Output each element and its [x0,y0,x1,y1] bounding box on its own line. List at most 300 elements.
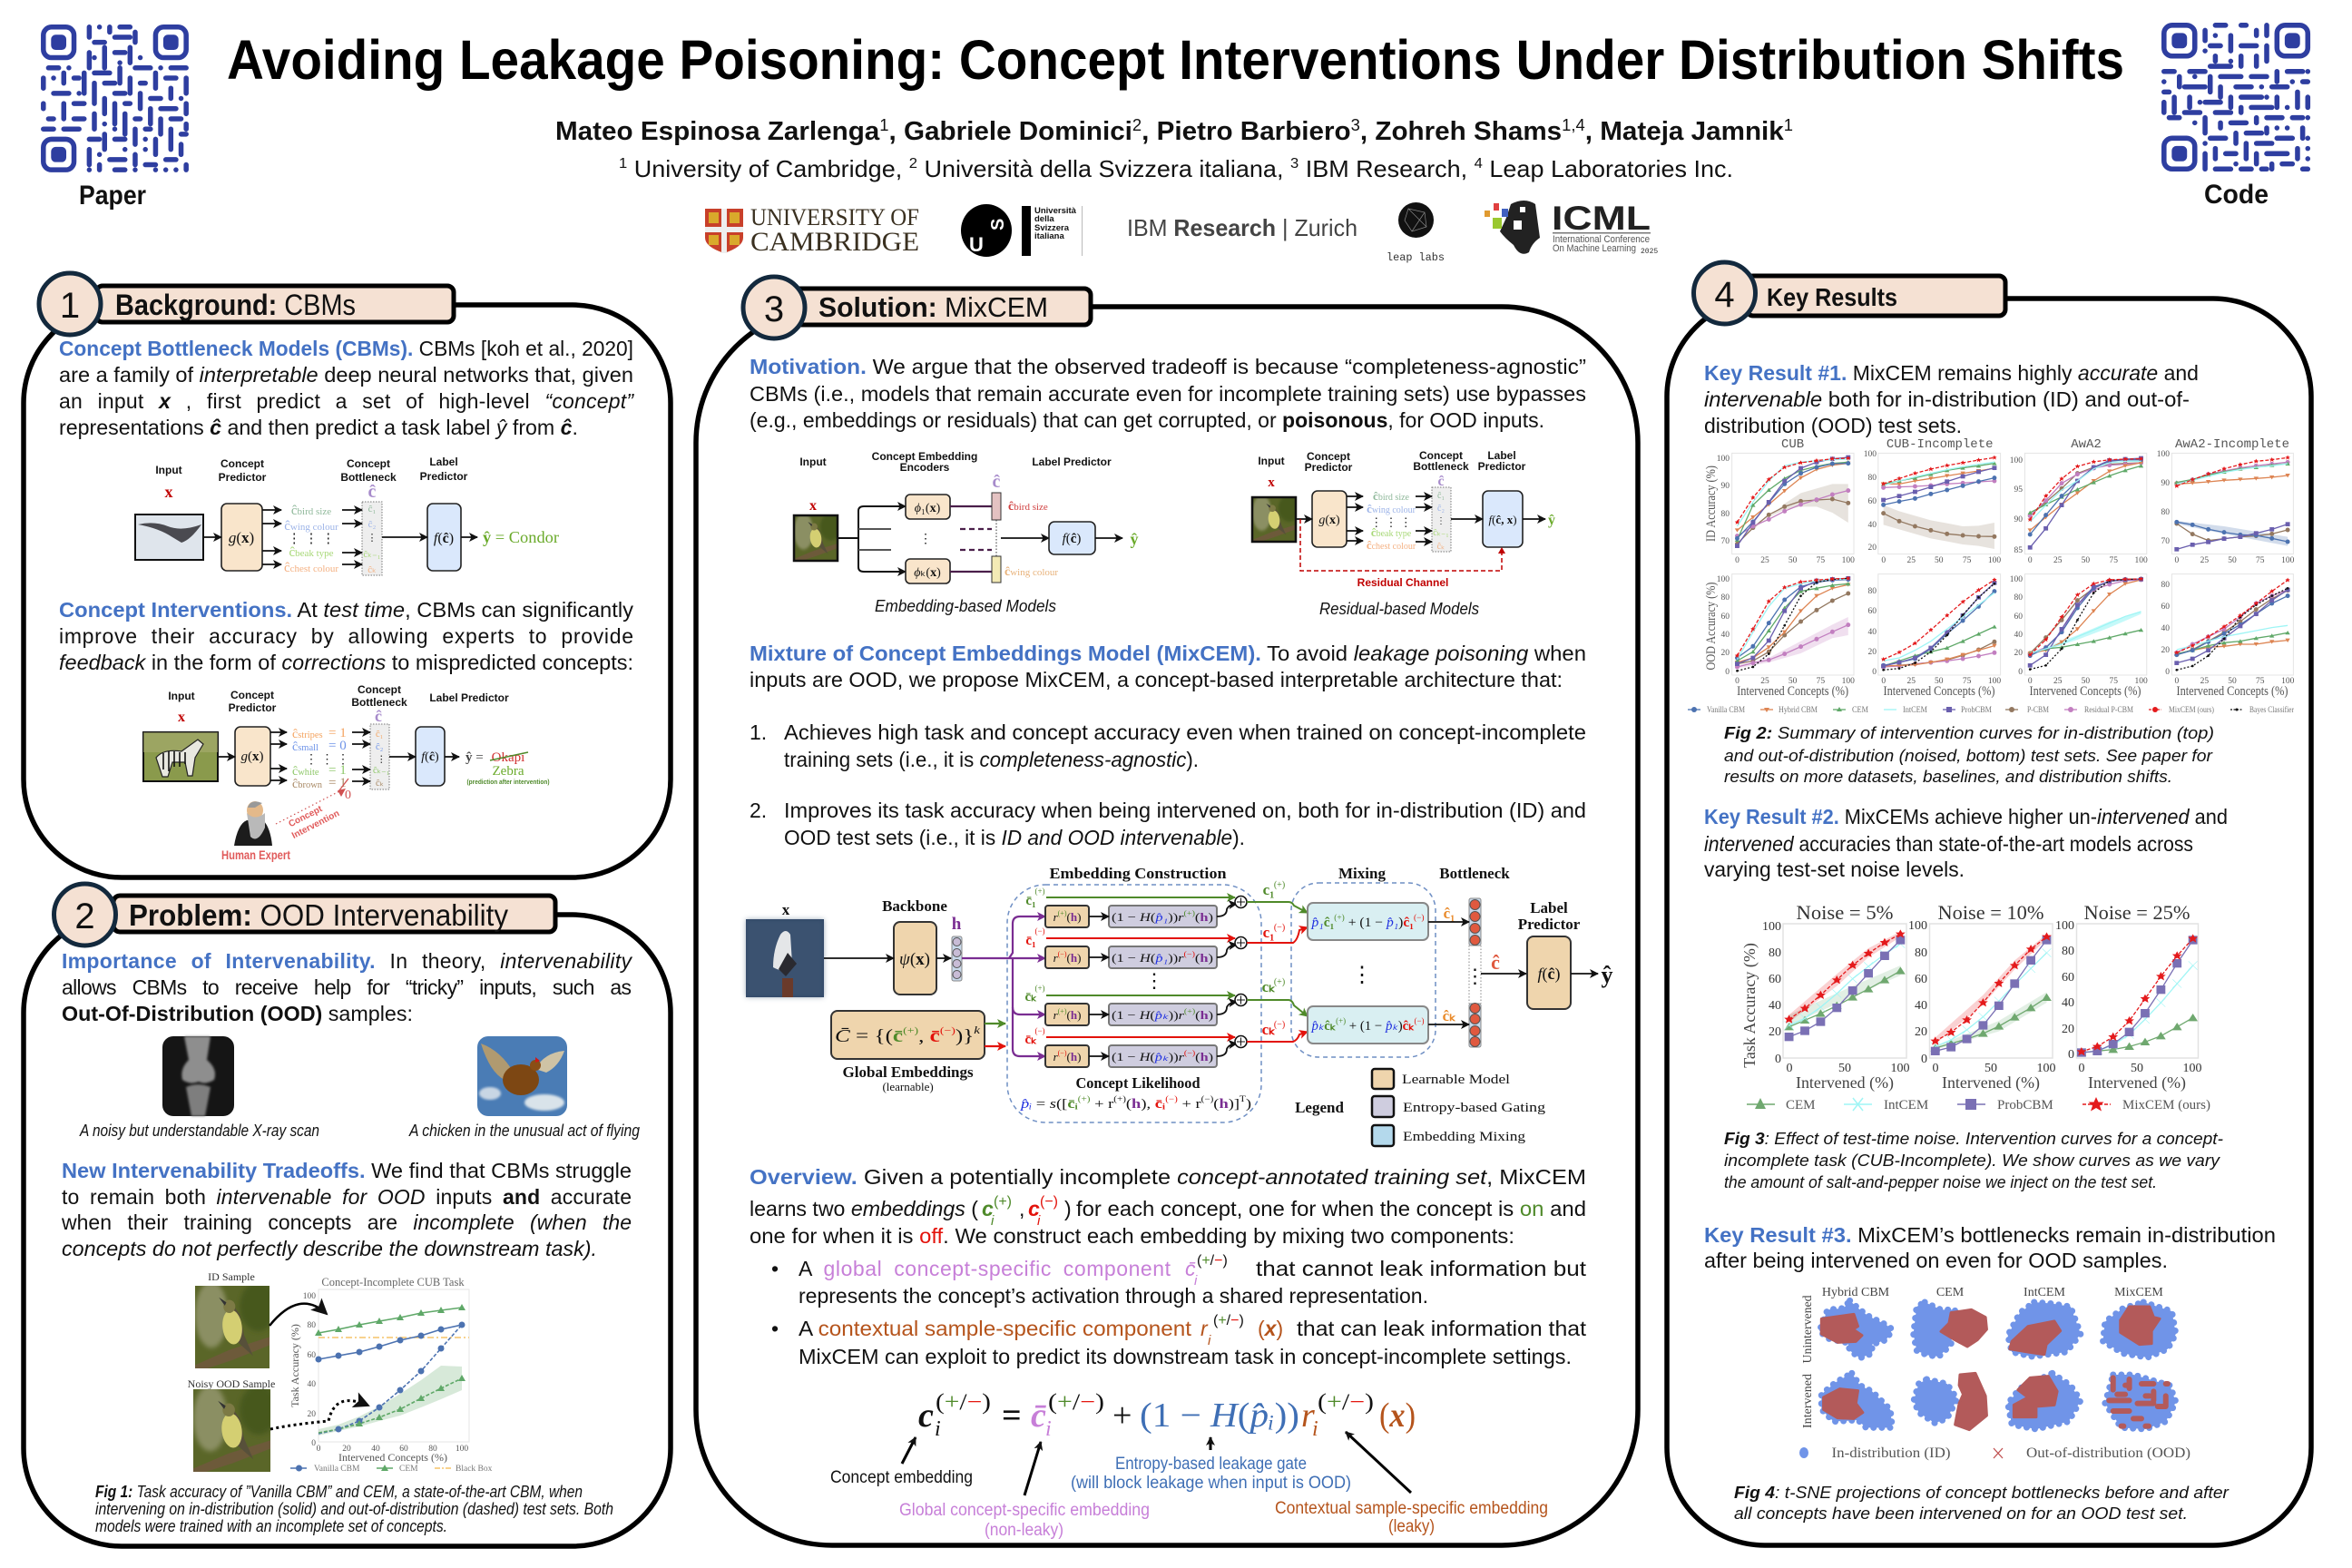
embedding construction: h) [1200,1008,1212,1022]
figure 1: intervention chart: 20 [342,1445,351,1454]
bullet: contextual component: A contextual sample-specific component [799,1317,1192,1340]
axis labels for figure 2: 100 [2134,556,2148,565]
figure: residual-based model: Bottleneck [1413,460,1469,473]
embedding construction: (−) [1034,1026,1045,1035]
figure: residual-based model: ĉₖ [1437,542,1445,552]
figure: CBM architecture: Concept [347,457,390,470]
number badge 2: 2 [74,897,95,936]
figure 3: noise curves: 100 [1891,1062,1909,1075]
list: MixCEM goals: 2. [750,799,767,822]
authors: 1 [879,116,889,134]
plots in a stretched coordinate frame [1732,453,2293,675]
embedding construction: Concept Likelihood [1076,1074,1200,1092]
icon: human expert: Human Expert [221,848,290,862]
axis labels for figure 2: 100 [2010,575,2023,584]
figure 3: noise curves: 20 [1769,1025,1781,1039]
formula: mixed embedding [830,1390,1548,1540]
axis labels for figure 2: 25 [1906,556,1916,565]
axis labels for figure 2: 0 [1735,677,1740,686]
figure: residual-based model: g(x) [1318,514,1340,527]
text: Concept Bottleneck Models [59,337,634,439]
mixing: cₖ [1262,1021,1276,1038]
mixing: + (1 − [1345,916,1387,930]
annotation: global embedding [899,1501,1150,1540]
figure: CBM architecture: f(ĉ) [434,531,454,546]
embedding construction: c̄ₖ [1024,990,1037,1004]
number badge 3 [743,277,805,338]
list: MixCEM goals: Improves its task accuracy when being intervened on, both for in-distribution (ID) and [784,799,1586,822]
figure: CBM architecture: ĉ₁ [368,504,377,514]
axis labels for figure 2: 50 [1935,677,1944,686]
mixing: (+) [1274,977,1285,987]
affiliations: 4 [1475,156,1483,172]
figure: residual-based model: ĉ₁ [1437,491,1445,501]
figure 4: t-SNE scatter: Intervened [1801,1374,1815,1428]
figure 3 caption: Fig 3: Effect of test-time noise. Intervention curves for a concept- [1724,1130,2223,1148]
axis labels for figure 2: 80 [2014,593,2023,603]
axis labels for figure 2: 100 [1864,450,1877,459]
figure 2: intervention curves: AwA2-Incomplete [2175,437,2289,452]
global embeddings: c̄ [930,1026,940,1046]
text: MixCEM introduction: Mixture of Concept Embeddings Model (MixCEM). To avoid leakage poisoning when [750,642,1586,665]
arrows to formula [902,1432,1411,1495]
mixing: (+) [1334,913,1345,922]
embedding construction: (+) [1184,909,1195,917]
axis labels for figure 2: 0 [2175,677,2180,686]
figure: CBM architecture [135,456,559,575]
figure: CBM architecture: ĉbird size [291,504,331,518]
text: Motivation: CBMs (i.e., models that remain accurate even for incomplete training sets) use bypasses [750,382,1586,406]
figure: concept interventions: x [178,710,185,725]
figure: concept interventions: Concept [287,804,325,829]
embedding construction: + r [1178,1097,1201,1112]
figure 1: intervention chart: CEM [399,1465,418,1474]
figure: concept interventions: ⋮ ⋮ ⋮ [305,753,349,767]
figure 3: noise curves: 80 [1915,946,1927,960]
global embeddings: k [974,1024,981,1036]
figure 3: noise curves: Intervened (%) [2088,1073,2186,1093]
axis labels for figure 2: 95 [2014,485,2023,495]
axis labels for figure 2: 100 [1842,677,1855,686]
text: Overview: i [1037,1213,1041,1229]
figure 2 legend: Hybrid CBM [1779,706,1818,715]
logo: ICML: ICML [1552,200,1651,237]
row 1 col 2 [1884,457,1994,536]
axis labels for figure 2: 75 [1963,556,1972,565]
mixing: p̂ₖĉₖ [1312,1019,1336,1034]
list: MixCEM goals: training sets (i.e., it is completeness-agnostic). [784,748,1199,771]
text: key result 2: Key Result #2. MixCEMs achieve higher un-intervened and [1704,805,2228,828]
authors: , Mateja Jamnik [1585,117,1785,146]
axis labels for figure 2: 90 [2014,515,2023,524]
figure 4 caption: all concepts have been intervened on for an OOD test set. [1734,1504,2188,1523]
figure: residual-based model: Concept [1307,450,1350,463]
authors: 2 [1132,116,1142,134]
axis labels for figure 2: 75 [1817,556,1825,565]
figure: concept interventions: Concept [230,689,274,701]
figure 1: intervention chart: 80 [307,1321,316,1330]
figure 3 legend: IntCEM [1884,1098,1928,1112]
figure: CBM architecture: ĉ [368,482,377,502]
figure 2 legend: ProbCBM [1961,706,1992,715]
figure 3: noise curves: Intervened (%) [1942,1073,2040,1093]
label predictor [1518,899,1613,1009]
axis labels for figure 2: 0 [2028,677,2033,686]
caption: chicken: A chicken in the unusual act of flying [408,1122,640,1140]
figure: concept interventions: Okapi [492,750,524,765]
bullet: contextual component: • [771,1317,779,1340]
figure: CBM architecture: ŷ = Condor [483,528,559,546]
global embeddings [831,1011,985,1093]
text: key result 1: intervenable both for in-distribution (ID) and out-of- [1704,387,2190,411]
number badge 3: 3 [764,289,784,329]
affiliations: Università della Svizzera italiana, [917,155,1290,182]
axis labels for figure 2: 100 [1717,455,1730,464]
figure: concept interventions: 0 [345,789,351,802]
figure 3: noise curves: 0 [1921,1053,1927,1066]
figure: CBM architecture: ⋮ ⋮ ⋮ [288,532,335,546]
figure 2 legend: Residual P-CBM [2084,706,2133,715]
heading bar 2: Problem: OOD Intervenability [129,898,508,932]
backbone [882,897,962,995]
logo: Università della Svizzera italiana [961,204,1083,257]
text: Overview: Overview. Given a potentially incomplete concept-annotated training set , MixCEM [750,1165,1586,1189]
figure: concept interventions: Label Predictor [429,691,509,704]
embedding construction: ( [1066,951,1071,965]
axis labels for figure 2: 80 [1720,510,1730,519]
figure: CBM architecture: ĉₖ [368,564,377,575]
logo: ICML: International Conference [1553,234,1650,245]
axis labels for figure 2: 60 [1720,612,1730,622]
figure: embedding-based model: Concept Embedding [872,450,977,463]
figure: CBM architecture: Label [429,456,458,468]
affiliations: IBM Research, [1298,155,1475,182]
figure 1: intervention chart: 100 [303,1292,316,1301]
figure 2 legend [1688,705,2295,715]
text: MixCEM introduction: inputs are OOD, we propose MixCEM, a concept-based interpretable architecture that: [750,668,1563,691]
embedding construction: Embedding Construction [1049,865,1227,882]
figure: embedding-based model: Embedding-based Models [875,597,1056,615]
row 2 col 2 [1884,580,1994,670]
figure 1: intervention chart: 40 [307,1380,316,1389]
axis labels for figure 2: 100 [2281,677,2295,686]
figure: residual-based model: ĉ₂ [1437,504,1445,514]
embedding construction: ( [1195,910,1200,924]
bullet: global component: c̄ [1185,1257,1196,1280]
authors: , Pietro Barbiero [1142,117,1351,146]
text: Importance of Intervenability: Out-Of-Distribution (OOD) samples: [62,1002,413,1025]
bullet: contextual component: MixCEM can exploit to predict its downstream task in concept-incomplete settings. [799,1345,1572,1368]
figure 3: noise curves: Noise = 10% [1938,901,2043,924]
axis labels for figure 2: 75 [2109,556,2118,565]
axis labels for figure 2: 100 [2157,450,2170,459]
logo: University of Cambridge: CAMBRIDGE [750,227,919,257]
logo: University of Cambridge [705,204,919,257]
logo: Università della Svizzera italiana: italiana [1034,231,1064,241]
figure: MixCEM architecture: x [782,901,790,918]
text: key result 3: after being intervened on even for OOD samples. [1704,1249,2168,1272]
bottleneck: ĉ [1491,951,1500,974]
axis labels for figure 2: 50 [1788,677,1798,686]
figure 4 caption: Fig 4: t-SNE projections of concept bottlenecks before and after [1734,1484,2230,1502]
axis labels for figure 2: 25 [2053,677,2063,686]
figure: CBM architecture: ĉ₂ [368,519,377,530]
affiliations: 1 [619,156,627,172]
figure: concept interventions: Input [168,690,195,702]
embedding construction: ( [1066,910,1071,924]
axis labels for figure 2: 100 [2281,556,2295,565]
figure: concept interventions: = 1 [328,763,347,778]
text: Concept Interventions: feedback in the form of corrections to mispredicted concepts: [59,651,633,674]
figure 1: intervention chart [188,1270,493,1476]
annotation: entropy gate: Entropy-based leakage gate [1115,1455,1307,1474]
axis labels for figure 2: 50 [1935,556,1944,565]
figure: residual-based model: Label [1487,449,1516,462]
caption: X-ray: A noisy but understandable X-ray scan [79,1122,319,1140]
text: MixCEM introduction [750,642,1586,691]
axis labels for figure 2: 25 [2200,677,2209,686]
annotation: entropy gate [1071,1455,1351,1493]
mixing: c₁ [1263,924,1274,941]
logo: Università della Svizzera italiana: Svizzera [1034,223,1070,233]
backbone: Backbone [882,897,947,915]
figure: concept interventions [143,683,550,862]
logo: ICML: On Machine Learning [1553,243,1636,254]
figure: embedding-based model: Label Predictor [1032,456,1112,468]
mixing: p̂₁)ĉ₁ [1387,916,1414,930]
figure: CBM architecture: Predictor [420,470,468,483]
text: Importance of Intervenability: Importance of Intervenability. In theory, intervenability [62,949,633,973]
figure: concept interventions: = 1 [328,726,347,740]
embedding construction: (−) [1201,1094,1213,1103]
mixing: p̂₁ĉ₁ [1312,916,1334,930]
heading bar 3: Solution: MixCEM [818,291,1048,323]
bullet: global component: • [771,1257,779,1280]
mixing: + (1 − [1346,1019,1386,1034]
figure 3: noise curves: 60 [1769,973,1781,986]
bullet: contextual component: (+/−) [1213,1313,1244,1328]
figure 3: noise curves: 60 [2062,971,2074,985]
axis labels for figure 2: 100 [1842,556,1855,565]
row 1 col 1 [1737,457,1848,546]
axis labels for figure 2: 20 [1720,649,1730,658]
axis labels for figure 2: 0 [1872,668,1877,677]
text: Concept Bottleneck Models: are a family of interpretable deep neural networks that, given [59,363,633,387]
heading bar 1: Background: CBMs [115,289,356,321]
figure 3: noise curves: Intervened (%) [1796,1073,1894,1093]
embedding construction: (1 − H(p̂ₖ))r [1112,1008,1183,1022]
authors: , Zohreh Shams [1360,117,1562,146]
embedding construction: r [1054,910,1059,924]
axis labels for figure 2: 90 [1720,482,1730,491]
logo: University of Cambridge: UNIVERSITY OF [750,204,919,230]
figure 2 legend: IntCEM [1903,706,1927,715]
number badge 1: 1 [60,286,80,326]
figure: concept interventions: Intervention [290,808,341,841]
bottleneck: Bottleneck [1439,865,1510,882]
legend: Learnable Model [1402,1073,1510,1087]
figure: embedding-based model: Input [799,456,827,468]
embedding construction: h) [1200,1050,1212,1063]
embedding construction: + r [1090,1097,1113,1112]
QR code: paper [44,27,186,170]
figure: residual-based model: ĉchest colour [1367,538,1416,552]
axis labels for figure 2: 0 [2165,668,2170,677]
figure: concept interventions: Zebra [493,764,524,779]
mixing: p̂ₖ)ĉₖ [1386,1019,1415,1034]
bullet: contextual component [771,1313,1587,1368]
formula: mixed embedding: (x) [1379,1396,1416,1435]
mixing: ⋮ [1351,963,1373,987]
figure 3: noise curves: 0 [1775,1053,1781,1066]
icon: human expert [221,801,290,862]
figure 3: noise curves: 50 [1984,1062,1997,1075]
axis labels for figure 2: 40 [1867,628,1877,637]
figure 4: t-SNE scatter: CEM [1936,1286,1965,1299]
text: Overview: one for when it is off. We construct each embedding by mixing two components: [750,1224,1514,1248]
figure: concept interventions: ĉₖ [376,779,384,789]
figure 3: noise curves: 40 [1769,999,1781,1013]
mixing: cₖ [1262,978,1276,995]
list: MixCEM goals [750,720,1586,849]
figure 3 legend [1747,1097,2210,1112]
annotation: global embedding: Global concept-specific embedding [899,1501,1150,1520]
figure: concept interventions: ĉ₁ [376,730,383,740]
mixing: (−) [1274,923,1285,933]
axis labels for figure 2: 25 [2200,556,2209,565]
axis labels for figure 2: 40 [2014,631,2023,640]
embedding construction: ) [1246,1097,1251,1112]
embedding construction: (−) [1058,1049,1067,1057]
backbone: h [952,915,962,934]
text: Motivation: (e.g., embeddings or residuals) that can get corrupted, or poisonous, for OOD inputs. [750,408,1544,432]
figure: embedding-based model: x [809,498,817,514]
bottleneck: ⋮ [1465,965,1485,987]
embedding construction: (+) [1113,1094,1126,1103]
figure 1: intervention chart: 20 [307,1410,316,1419]
legend: Entropy-based Gating [1403,1101,1546,1115]
axis labels for figure 2: 80 [2161,581,2170,590]
formula: mixed embedding: + [1112,1396,1132,1435]
figure 4: t-SNE scatter [1799,1286,2190,1461]
figure: concept interventions: ĉwhite [292,765,319,779]
figure 3: noise curves: 50 [1838,1062,1851,1075]
figure 1: intervention chart: 100 [456,1445,468,1454]
figure: embedding-based model: ϕₖ(x) [914,566,941,580]
figure: concept interventions: g(x) [241,750,263,764]
text: key result 1 [1704,361,2199,437]
mixing: (+) [1274,880,1285,890]
figure 1: intervention chart: ID Sample [208,1270,255,1283]
formula: mixed embedding: i [1312,1417,1318,1441]
embedding construction: ( [1066,1008,1071,1022]
number badge 1 [39,273,101,335]
annotation: contextual embedding [1275,1499,1548,1536]
axis labels for figure 2: 20 [2161,646,2170,655]
global embeddings: Global Embeddings [843,1063,974,1081]
text: Concept Interventions: improve their accuracy by allowing experts to provide [59,624,633,648]
global embeddings: , [918,1026,930,1046]
embedding construction: (+) [1034,984,1045,993]
figure 2: intervention curves [1688,437,2295,715]
axis labels for figure 2: 0 [1725,668,1730,677]
figure: embedding-based model: ĉ [993,472,1001,492]
row 1 col 4 [2177,457,2288,549]
axis labels for figure 2: 75 [2256,677,2265,686]
figure: residual-based model: ⋮ [1436,516,1446,526]
axis labels for figure 2: 100 [2134,677,2148,686]
axis labels for figure 2: 80 [1867,587,1877,596]
figure 1: intervention chart: 0 [317,1445,321,1454]
text: Overview: c [982,1197,994,1220]
embedding construction: h) [1200,951,1212,965]
figure: residual-based model: ĉwing colour [1367,502,1416,515]
axis labels for figure 2: 20 [1867,544,1877,553]
figure: MixCEM architecture [746,865,1613,1146]
figure 4 legend [1799,1446,2190,1461]
text: key result 2: intervened accuracies than state-of-the-art models across [1704,832,2193,856]
logo: IBM Research Zurich: IBM Research | Zurich [1127,214,1357,241]
text: Motivation [750,355,1586,432]
annotation: entropy gate: (will block leakage when input is OOD) [1071,1474,1351,1493]
axis labels for figure 2: 50 [2082,677,2090,686]
panel 1: Background [24,273,671,877]
axis labels for figure 2: 40 [1720,631,1730,640]
axis labels for figure 2: 75 [2256,556,2265,565]
panel 4: Key Results [1667,262,2311,1545]
title: Avoiding Leakage Poisoning: Concept Interventions Under Distribution Shifts [227,29,2124,91]
figure: residual-based model: f(ĉ, x) [1488,513,1517,526]
axis labels for figure 2: 50 [1788,556,1798,565]
figure: embedding-based model: ĉwing colour [1004,565,1058,579]
figure: concept interventions: f(ĉ) [421,750,439,764]
figure: residual-based model: Predictor [1305,461,1353,474]
text: New Intervenability Tradeoffs [61,1159,632,1260]
formula: mixed embedding: (+/−) [1318,1390,1374,1415]
logo: leap labs: leap labs [1387,251,1445,264]
figure 2 legend: CEM [1852,706,1868,715]
figure 4: t-SNE scatter: MixCEM [2114,1286,2163,1299]
embedding construction: (−) [1058,950,1067,958]
embedding construction: h) [1071,910,1081,924]
annotation: contextual embedding: Contextual sample-specific embedding [1275,1499,1548,1518]
embedding construction: (−) [1184,1049,1196,1057]
figure 3: noise curves: 0 [2068,1048,2074,1062]
mixing [1247,865,1436,1057]
text: Overview [750,1165,1586,1248]
image: X-ray [162,1036,234,1116]
bottleneck: ĉₖ [1443,1007,1456,1024]
text: New Intervenability Tradeoffs: New Intervenability Tradeoffs. We find that CBMs struggle [62,1159,632,1182]
text: key result 2 [1704,805,2228,881]
embedding construction: p̂ᵢ = s([c̄ᵢ [1021,1097,1076,1112]
text: Overview: (−) [1040,1194,1058,1210]
embedding construction: c̄₁ [1025,934,1036,948]
global embeddings: (+) [903,1025,919,1036]
figure: concept interventions: Concept [358,683,401,696]
figure: embedding-based model: ⋮ [919,531,932,545]
embedding construction: (+) [1034,887,1045,896]
figure: CBM architecture: ⋮ [367,533,377,544]
axis labels for figure 2: 0 [1881,556,1886,565]
image: flying chicken [477,1036,567,1116]
global embeddings: (−) [940,1025,956,1036]
figure: concept interventions: ĉsmall [292,740,318,754]
bullet: global component [771,1253,1587,1308]
annotation: concept embedding: Concept embedding [830,1468,973,1487]
figure: residual-based model: ŷ [1548,513,1555,528]
mixing: (−) [1415,1016,1425,1025]
